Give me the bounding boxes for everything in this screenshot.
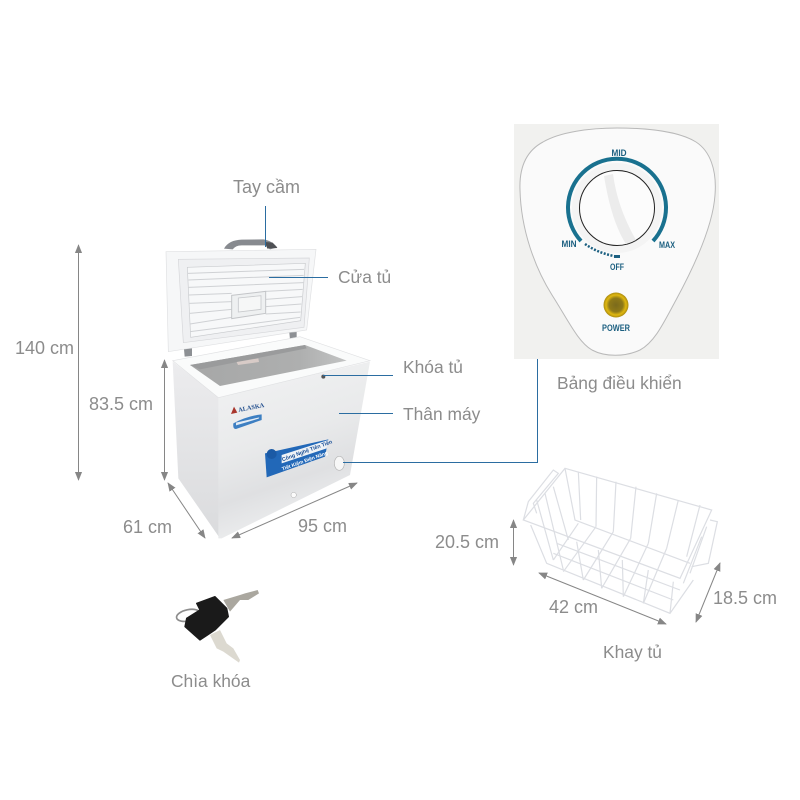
dimension: 83.5 cm: 83.5 cm <box>89 394 153 414</box>
leader lines <box>266 206 538 462</box>
label: Khóa tủ: Khóa tủ <box>403 357 463 377</box>
label: Bảng điều khiển: Bảng điều khiển <box>557 373 682 393</box>
dial scale <box>568 159 666 258</box>
freezer <box>166 239 370 538</box>
rim <box>523 468 712 578</box>
sticker <box>265 438 333 477</box>
dimension: 61 cm: 61 cm <box>123 517 172 537</box>
label: Chìa khóa: Chìa khóa <box>171 671 251 691</box>
keys <box>175 590 259 663</box>
front wires <box>531 487 693 613</box>
label: Khay tủ: Khay tủ <box>603 642 662 662</box>
label: Thân máy: Thân máy <box>403 404 481 424</box>
handle <box>224 239 277 249</box>
lid <box>166 249 316 352</box>
body <box>173 337 370 538</box>
power button <box>604 292 628 318</box>
hinges <box>184 348 192 357</box>
key fob <box>185 597 228 640</box>
dimension: 42 cm: 42 cm <box>549 597 598 617</box>
panel: control panel: MAX <box>659 240 675 250</box>
back wires <box>565 468 700 563</box>
sticker: Tiết Kiệm Điện Năng <box>281 449 329 473</box>
brand badge: ALASKA <box>238 402 265 414</box>
label: Cửa tủ: Cửa tủ <box>338 267 391 287</box>
power label: POWER <box>602 323 630 333</box>
panel: control panel: OFF <box>610 262 624 272</box>
dimension: 140 cm: 140 cm <box>15 338 74 358</box>
basket <box>523 468 717 613</box>
label: Tay cầm: Tay cầm <box>233 177 300 197</box>
dial labels: MID <box>612 148 627 158</box>
panel: control panel: MIN <box>562 239 576 249</box>
upper key blade <box>223 590 259 612</box>
dial on body <box>334 456 344 470</box>
lower key blade <box>210 630 240 663</box>
dimension: 20.5 cm: 20.5 cm <box>435 532 499 552</box>
lock <box>321 375 325 379</box>
dial knob <box>572 163 662 253</box>
dimension arrows <box>78 245 720 624</box>
brand badge <box>231 402 265 429</box>
panel: control panel <box>514 124 719 359</box>
control plate <box>520 128 715 355</box>
dimension: 18.5 cm: 18.5 cm <box>713 588 777 608</box>
dimension: 95 cm: 95 cm <box>298 516 347 536</box>
sticker: Công Nghệ Tiên Tiến <box>281 438 333 463</box>
key ring <box>175 607 201 623</box>
